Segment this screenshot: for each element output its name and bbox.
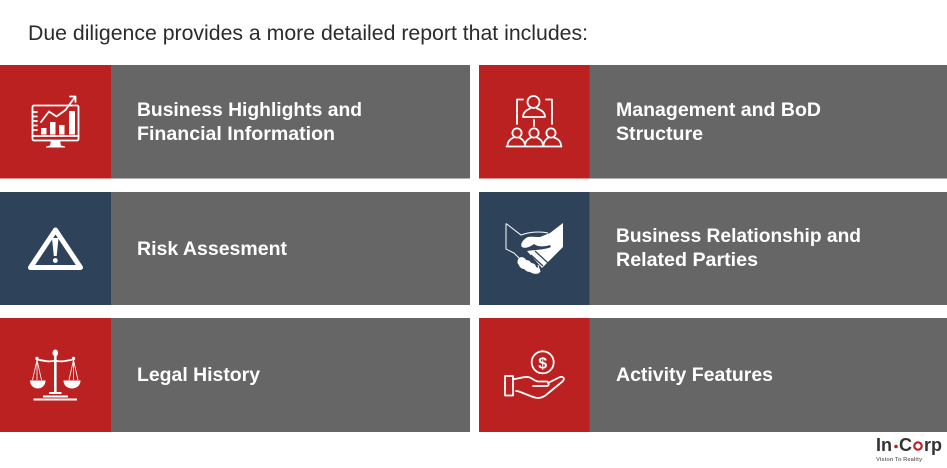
label: Financial Information [137,123,335,145]
panel: business highlights [0,65,470,178]
label: Related Parties [616,249,758,271]
logo: InCorp: C [899,435,912,455]
label: Risk Assesment [137,238,288,260]
panel: management [479,65,947,178]
label: Structure [616,123,703,145]
icon: hand with coin: $ [538,355,547,372]
logo: InCorp: Vision To Reality [876,457,923,463]
icon: monitor with chart [32,96,78,148]
logo: InCorp: rp [924,435,942,455]
panel: risk [0,192,470,305]
label: Activity Features [616,364,773,386]
label: Legal History [137,364,260,386]
icon: scales [30,350,80,400]
label: Business Relationship and [616,225,861,247]
panel: activity features [479,318,947,432]
icon: warning triangle [30,230,80,268]
label: Business Highlights and [137,99,362,121]
label: Management and BoD [616,99,821,121]
icon: hand with coin [505,351,564,398]
logo: InCorp [876,435,942,463]
icon: handshake [506,223,563,274]
title: Due diligence provides a more detailed report that includes: [28,21,588,45]
logo: InCorp: In [876,435,892,455]
panel: business relationship [479,192,947,305]
panel: legal history [0,318,470,432]
icon: org people [506,96,562,146]
